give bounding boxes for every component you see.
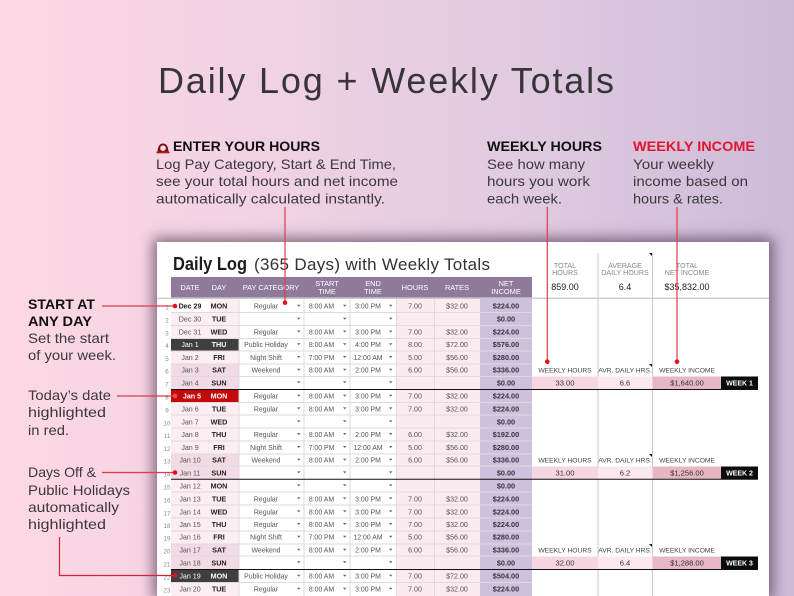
row 3: 8:00 AM [309, 330, 334, 336]
sheet heading: Daily Log [173, 254, 247, 274]
row 16 [164, 494, 519, 504]
row 10: $0.00 [497, 417, 515, 426]
row 17: $224.00 [493, 507, 519, 516]
row 5: $280.00 [493, 353, 519, 362]
row 20: $336.00 [493, 546, 519, 555]
arrow: public holidays [60, 537, 177, 578]
row 19: $56.00 [446, 534, 468, 542]
row 7: SUN [211, 378, 227, 387]
week 3 summary: WEEKLY INCOME [659, 548, 715, 555]
row 13: SAT [212, 456, 227, 465]
row 9: 9 [165, 407, 169, 414]
row 17: $32.00 [446, 508, 468, 516]
row 18: THU [212, 520, 226, 529]
row 23: $224.00 [493, 585, 519, 594]
row 15: $0.00 [497, 481, 515, 490]
row 16: TUE [212, 494, 226, 503]
row 11: THU [212, 430, 226, 439]
row 13: $56.00 [446, 457, 468, 465]
table header: DAY [212, 283, 226, 292]
row 7: Jan 4 [181, 379, 199, 387]
row 13: 13 [164, 459, 171, 466]
row 20: 6.00 [408, 547, 422, 555]
spreadsheet panel background [157, 242, 769, 596]
week 2 summary: WEEK 2 [726, 470, 753, 478]
row 21: SUN [211, 558, 227, 567]
row 4: 8:00 AM [309, 342, 334, 349]
row 8: 3:00 PM [355, 394, 381, 401]
week 2 summary: AVR. DAILY HRS. [598, 458, 652, 465]
row 5: 5 [165, 356, 169, 363]
row 22: 8:00 AM [309, 574, 334, 581]
row 13: $336.00 [493, 456, 519, 465]
row 22: Jan 19 [179, 573, 201, 581]
callout: days off and public holidays: highlighted [28, 517, 106, 532]
row 22: Public Holiday [244, 574, 288, 581]
row 2: 2 [165, 318, 169, 325]
row 16: $224.00 [493, 494, 519, 503]
row 11: 6.00 [408, 431, 422, 439]
row 14: SUN [211, 468, 227, 477]
row 6: SAT [212, 366, 227, 375]
callout: enter your hours: automatically calculated instantly. [156, 192, 385, 206]
table header: END [365, 279, 381, 288]
callout: days off and public holidays [28, 465, 130, 532]
row 3 [165, 328, 519, 338]
row 10: WED [211, 417, 227, 426]
table header: DATE [180, 283, 200, 292]
row 17: 3:00 PM [355, 509, 381, 516]
row 12 [164, 443, 519, 453]
row 7: 7 [165, 381, 169, 388]
row 13: 6.00 [408, 457, 422, 465]
row 12: 12:00 AM [353, 445, 383, 452]
row 10: Jan 7 [181, 418, 199, 426]
row 21: $0.00 [497, 558, 515, 567]
row 12: 5.00 [408, 444, 422, 452]
row 16: $32.00 [446, 495, 468, 503]
row 18: 8:00 AM [309, 522, 334, 529]
row 5: Jan 2 [181, 354, 199, 362]
row 11: 11 [164, 433, 171, 440]
table header: PAY CATEGORY [243, 283, 299, 292]
row 19: 7:00 PM [309, 535, 335, 542]
row 1: 8:00 AM [309, 304, 334, 311]
row 19: 5.00 [408, 534, 422, 542]
week 1 summary: WEEKLY HOURS [538, 368, 592, 375]
row 10 [164, 417, 515, 427]
row 14: $0.00 [497, 468, 515, 477]
summary totals: HOURS [552, 269, 578, 277]
summary dividers [157, 253, 769, 596]
row 16: Jan 13 [179, 495, 201, 503]
summary totals: NET INCOME [665, 269, 709, 277]
summary totals [551, 253, 710, 292]
table header: RATES [445, 283, 469, 292]
row 17: WED [211, 507, 227, 516]
callout: weekly hours: WEEKLY HOURS [487, 139, 602, 154]
row 4: Jan 1 [181, 341, 199, 349]
arrow: weekly income [675, 207, 679, 364]
table header: START [315, 279, 339, 288]
summary totals: TOTAL [676, 262, 698, 270]
row 6: $56.00 [446, 367, 468, 375]
row 23: 8:00 AM [309, 587, 334, 594]
week 3 summary: WEEK 3 [726, 560, 753, 568]
callout: weekly income: Your weekly [633, 157, 714, 172]
arrow: today's date [117, 394, 177, 398]
row 2: TUE [212, 315, 226, 324]
row 17: Regular [254, 509, 279, 516]
row 1: $32.00 [446, 303, 468, 311]
callout: weekly hours: See how many [487, 157, 585, 172]
row 19: $280.00 [493, 533, 519, 542]
week 1 summary: 33.00 [555, 378, 575, 388]
row 4: $72.00 [446, 341, 468, 349]
row 11: 8:00 AM [309, 432, 334, 439]
row 23: $32.00 [446, 586, 468, 594]
row 12: Jan 9 [181, 444, 199, 452]
row 5: $56.00 [446, 354, 468, 362]
week 1 summary: $1,640.00 [670, 378, 704, 388]
row 13: Weekend [252, 458, 281, 465]
icon: alarm clock [156, 144, 170, 153]
row 3: 3 [165, 330, 169, 338]
callout: weekly income [633, 139, 755, 206]
row 4: THU [212, 340, 226, 349]
callout: weekly income: income based on [633, 174, 748, 189]
callout: start at any day: Set the start [28, 331, 109, 346]
row 22: $504.00 [493, 572, 519, 581]
week 1 summary [532, 364, 758, 389]
row 18: 18 [164, 523, 171, 530]
row 13: 2:00 PM [355, 458, 381, 465]
row 3: WED [211, 328, 227, 336]
row 13: 8:00 AM [309, 458, 334, 465]
row 5: Night Shift [250, 355, 282, 362]
row 4: 4 [165, 343, 169, 350]
arrow: weekly hours [545, 207, 550, 364]
row 8: Regular [254, 394, 279, 401]
row 23: 23 [164, 588, 171, 595]
arrow: start at any day [102, 304, 177, 308]
row 7 [165, 378, 515, 388]
row 19 [164, 533, 519, 543]
week 2 summary: 31.00 [555, 468, 575, 478]
week 2 summary [532, 454, 758, 479]
callout: enter your hours: see your total hours and net income [156, 174, 398, 189]
row 1: 1 [165, 305, 169, 312]
callout: enter your hours [156, 139, 398, 206]
grid lines [157, 298, 769, 596]
row 20: Jan 17 [179, 547, 201, 555]
row 19: 12:00 AM [353, 535, 383, 542]
row 8: 8 [165, 395, 169, 402]
row 18: 7.00 [408, 521, 422, 529]
row 22 [164, 572, 519, 582]
row 11: Jan 8 [181, 431, 199, 439]
row 15: MON [211, 481, 227, 490]
row 12: FRI [213, 443, 225, 452]
row 8: MON [211, 392, 227, 401]
row 22: 7.00 [408, 573, 422, 581]
row 3: $32.00 [446, 328, 468, 336]
row 17: 8:00 AM [309, 509, 334, 516]
row 1: Regular [254, 304, 279, 311]
row 1: 3:00 PM [355, 304, 381, 311]
row 16: 7.00 [408, 495, 422, 503]
row 17 [164, 507, 519, 517]
row 9: $224.00 [493, 404, 519, 413]
row 6 [165, 366, 519, 376]
row 15 [164, 481, 515, 491]
callout: start at any day [28, 297, 116, 363]
row 18: $32.00 [446, 521, 468, 529]
row 9: Jan 6 [181, 405, 199, 413]
callout: weekly income: WEEKLY INCOME [633, 139, 755, 154]
row 4: Public Holiday [244, 342, 288, 349]
callout: days off and public holidays: automatically [28, 500, 119, 515]
row 12: Night Shift [250, 445, 282, 452]
row 4: $576.00 [493, 340, 519, 349]
title: Daily Log + Weekly Totals [158, 60, 614, 101]
week 2 summary: $1,256.00 [670, 468, 704, 478]
row 5: FRI [213, 353, 225, 362]
callout: weekly income: hours & rates. [633, 192, 723, 206]
row 5: 7:00 PM [309, 355, 335, 362]
callout: start at any day: of your week. [28, 348, 116, 363]
callout: today's date [28, 388, 111, 438]
callout: today's date: in red. [28, 423, 69, 438]
row 9: 7.00 [408, 405, 422, 413]
row 15: 15 [164, 484, 171, 491]
row 15: Jan 12 [179, 482, 201, 490]
row 17: 17 [164, 510, 171, 517]
row 11: Regular [254, 432, 279, 439]
row 20: 20 [164, 549, 171, 556]
row 9: Regular [254, 406, 279, 413]
row 23: 3:00 PM [355, 587, 381, 594]
row 1: MON [211, 302, 227, 311]
row 2: $0.00 [497, 315, 515, 324]
week 1 summary: WEEK 1 [726, 380, 753, 388]
week 2 summary: 6.2 [620, 468, 630, 478]
row 8: 7.00 [408, 393, 422, 401]
table header: NET [499, 279, 514, 288]
row 5: 5.00 [408, 354, 422, 362]
row 23: Regular [254, 587, 279, 594]
table header: HOURS [402, 283, 428, 292]
row 3: $224.00 [493, 328, 519, 336]
row 8: $224.00 [493, 392, 519, 401]
row 11: 2:00 PM [355, 432, 381, 439]
row 21: 21 [164, 561, 171, 568]
row 23 [164, 585, 519, 595]
week 3 summary: AVR. DAILY HRS. [598, 548, 652, 555]
week 3 summary: 32.00 [555, 558, 575, 568]
callout: weekly hours: each week. [487, 192, 562, 206]
row 8: Jan 5 [183, 393, 201, 401]
callout: start at any day: ANY DAY [28, 314, 92, 329]
row 9 [165, 404, 519, 414]
summary totals: DAILY HOURS [601, 269, 649, 277]
row 9: $32.00 [446, 405, 468, 413]
week 2 summary: WEEKLY INCOME [659, 458, 715, 465]
row 20: 8:00 AM [309, 548, 334, 555]
row 17: Jan 14 [179, 508, 201, 516]
row 16: Regular [254, 496, 279, 503]
row 9: 3:00 PM [355, 406, 381, 413]
row 3: 7.00 [408, 328, 422, 336]
week 1 summary: 6.6 [620, 378, 630, 388]
row 12: $56.00 [446, 444, 468, 452]
column fills [171, 299, 532, 596]
row 3: Regular [254, 330, 279, 336]
sheet heading: (365 Days) with Weekly Totals [254, 255, 490, 274]
callout: start at any day: START AT [28, 297, 96, 312]
row 11: $192.00 [493, 430, 519, 439]
row 13 [164, 456, 519, 466]
row 16: 16 [164, 497, 171, 504]
table header [171, 277, 532, 298]
row 18: $224.00 [493, 520, 519, 529]
week 2 summary: WEEKLY HOURS [538, 458, 592, 465]
week 3 summary: WEEKLY HOURS [538, 548, 592, 555]
row 22: MON [211, 572, 227, 581]
row 2 [165, 315, 515, 325]
row 22: 22 [164, 575, 171, 582]
row 17: 7.00 [408, 508, 422, 516]
week 1 summary: WEEKLY INCOME [659, 368, 715, 375]
row 19: Night Shift [250, 535, 282, 542]
row 5 [165, 353, 519, 363]
table header: TIME [364, 287, 382, 296]
week 3 summary [532, 544, 758, 569]
row 14 [164, 468, 515, 478]
row 11 [164, 430, 519, 440]
row 9: 8:00 AM [309, 406, 334, 413]
row 8 [165, 392, 519, 402]
week 3 summary: $1,288.00 [670, 558, 704, 568]
row 6: 8:00 AM [309, 368, 334, 375]
row 22: 3:00 PM [355, 574, 381, 581]
row 5: 12:00 AM [353, 355, 383, 362]
callout: today's date: Today’s date [28, 388, 111, 403]
summary totals: AVERAGE [608, 262, 642, 270]
row 20: $56.00 [446, 547, 468, 555]
row 6: $336.00 [493, 366, 519, 375]
row 7: $0.00 [497, 378, 515, 387]
week 3 summary: 6.4 [620, 558, 630, 568]
row 4 [165, 340, 519, 350]
row 18 [164, 520, 519, 530]
row 10: 10 [164, 420, 171, 427]
row 16: 3:00 PM [355, 496, 381, 503]
row 12: 12 [164, 446, 171, 453]
arrow: enter your hours [283, 207, 287, 305]
row 20 [164, 546, 519, 556]
highlighted date cells [171, 338, 239, 582]
callout: days off and public holidays: Public Holidays [28, 483, 130, 498]
arrow: days off [102, 470, 177, 475]
row 21: Jan 18 [179, 559, 201, 567]
row 4: 8.00 [408, 341, 422, 349]
summary totals: 6.4 [619, 282, 631, 292]
row 19: FRI [213, 533, 225, 542]
row 6: 6 [165, 369, 169, 376]
row 6: Weekend [252, 368, 281, 375]
callout: today's date: highlighted [28, 405, 106, 420]
row 16: 8:00 AM [309, 496, 334, 503]
week 1 summary: AVR. DAILY HRS. [598, 368, 652, 375]
callout: days off and public holidays: Days Off & [28, 465, 96, 480]
row 23: 7.00 [408, 586, 422, 594]
row 18: Jan 15 [179, 521, 201, 529]
row 8: $32.00 [446, 393, 468, 401]
row 18: Regular [254, 522, 279, 529]
row 22: $72.00 [446, 573, 468, 581]
row 2: Dec 30 [179, 316, 201, 324]
row 6: Jan 3 [181, 367, 199, 375]
row 12: 7:00 PM [309, 445, 335, 452]
row 3: 3:00 PM [355, 330, 381, 336]
row 20: SAT [212, 546, 227, 555]
row 9: TUE [212, 404, 226, 413]
row 3: Dec 31 [179, 328, 201, 336]
row 1 [165, 302, 519, 312]
row 6: 6.00 [408, 367, 422, 375]
summary totals: TOTAL [554, 262, 576, 270]
row 11: $32.00 [446, 431, 468, 439]
callout: enter your hours: Log Pay Category, Start & End Time, [156, 157, 396, 172]
table header: TIME [318, 287, 336, 296]
row 20: Weekend [252, 548, 281, 555]
row 12: $280.00 [493, 443, 519, 452]
summary totals: $35,832.00 [664, 282, 710, 292]
row 8: 8:00 AM [309, 394, 334, 401]
table header: INCOME [491, 287, 521, 296]
row 21 [164, 558, 515, 568]
row 19: 19 [164, 536, 171, 543]
row 6: 2:00 PM [355, 368, 381, 375]
callout: weekly hours [487, 139, 602, 206]
row 14: 14 [164, 471, 171, 478]
row 13: Jan 10 [179, 457, 201, 465]
row 4: 4:00 PM [355, 342, 381, 349]
callout: weekly hours: hours you work [487, 174, 590, 189]
row 1: $224.00 [493, 302, 519, 311]
callout: enter your hours: ENTER YOUR HOURS [173, 139, 320, 154]
row 23: TUE [212, 585, 226, 594]
row 23: Jan 20 [179, 586, 201, 594]
row 1: Dec 29 [179, 303, 201, 311]
row 20: 2:00 PM [355, 548, 381, 555]
row 18: 3:00 PM [355, 522, 381, 529]
row 14: Jan 11 [180, 469, 200, 477]
summary totals: 859.00 [551, 282, 579, 292]
week separator lines [171, 390, 758, 570]
row 19: Jan 16 [179, 534, 201, 542]
row 1: 7.00 [408, 303, 422, 311]
